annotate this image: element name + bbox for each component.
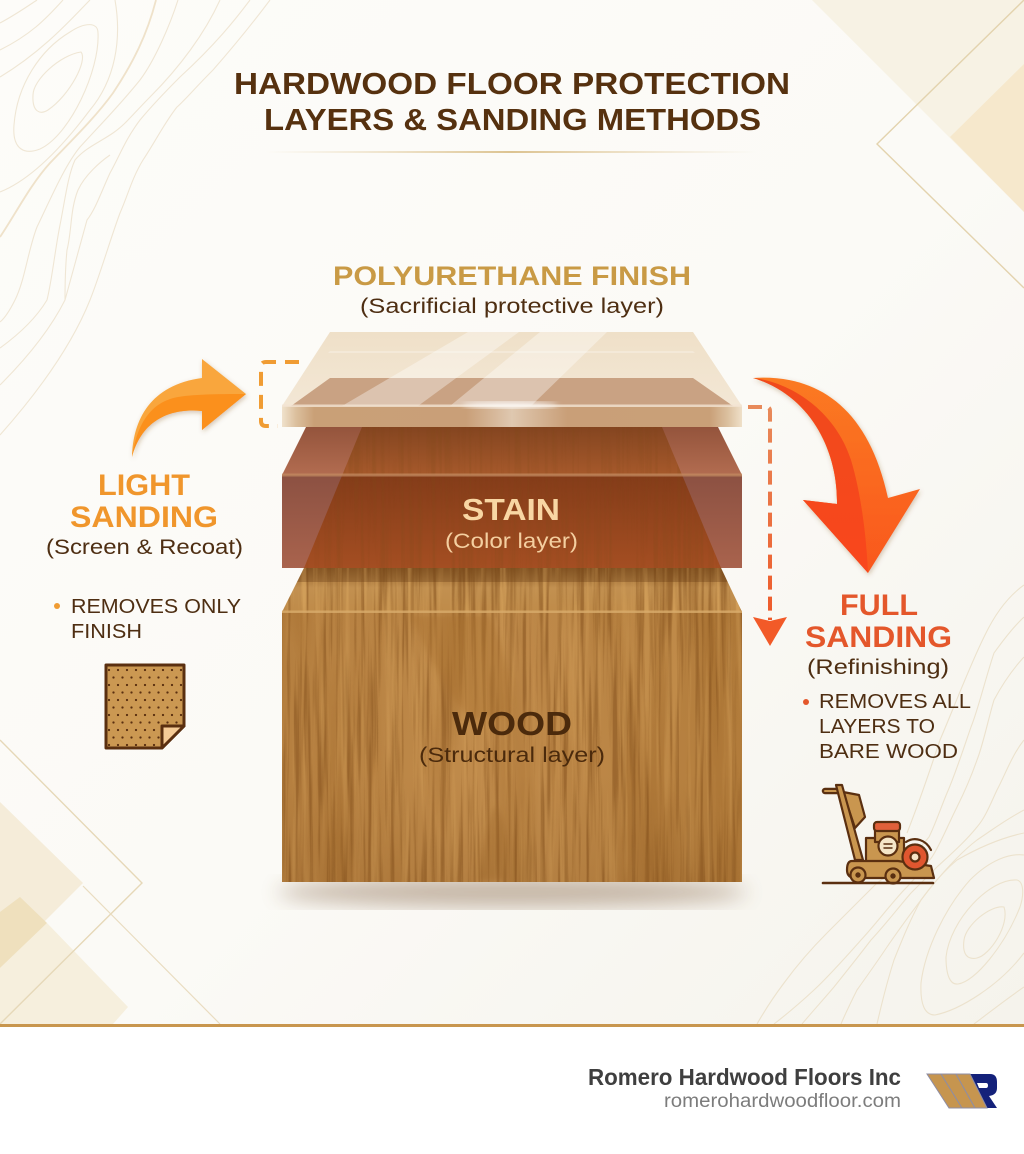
heading: light sanding: SANDING	[70, 501, 218, 534]
bullet: removes all layers	[803, 691, 971, 763]
stain label: STAIN	[462, 492, 560, 527]
bullet: removes all layers: LAYERS TO	[819, 716, 935, 738]
heading: full sanding: SANDING	[805, 621, 952, 654]
footer company name: Romero Hardwood Floors Inc	[588, 1064, 901, 1090]
wood label: WOOD	[452, 705, 572, 742]
bracket: light sanding range	[261, 362, 299, 426]
stain label: (Color layer)	[445, 530, 578, 553]
heading: polyurethane finish label: (Sacrificial protective layer)	[360, 294, 664, 318]
icon: sandpaper	[106, 665, 184, 748]
title	[234, 66, 790, 137]
bullet: removes only finish: FINISH	[71, 621, 142, 643]
stain layer	[282, 427, 742, 568]
dashed arrow: full sanding depth	[748, 407, 787, 646]
wood label	[419, 705, 605, 767]
polyurethane layer	[282, 332, 742, 427]
arrow: light sanding	[132, 359, 246, 457]
heading: light sanding	[46, 469, 243, 559]
heading: full sanding: (Refinishing)	[807, 656, 949, 679]
bullet: removes only finish	[54, 596, 241, 643]
icon: floor sander	[823, 785, 934, 884]
footer company name	[588, 1064, 901, 1112]
footer company name: romerohardwoodfloor.com	[664, 1091, 901, 1112]
heading: polyurethane finish label: POLYURETHANE FINISH	[333, 261, 691, 291]
layered floor diagram	[277, 332, 747, 907]
wood layer	[282, 568, 742, 882]
title: LAYERS & SANDING METHODS	[264, 102, 761, 137]
footer	[0, 1024, 1024, 1154]
heading: full sanding: FULL	[840, 589, 918, 622]
heading: polyurethane finish label	[333, 261, 691, 318]
title: HARDWOOD FLOOR PROTECTION	[234, 66, 790, 101]
heading: light sanding: LIGHT	[98, 469, 190, 502]
icon: company logo	[927, 1074, 997, 1108]
arrow: full sanding	[753, 378, 920, 573]
heading: light sanding: (Screen & Recoat)	[46, 536, 243, 559]
wood label: (Structural layer)	[419, 744, 605, 767]
bullet: removes all layers: BARE WOOD	[819, 741, 958, 763]
bullet: removes all layers: REMOVES ALL	[819, 691, 971, 713]
heading: full sanding	[805, 589, 952, 679]
stain label	[445, 492, 578, 553]
bullet: removes only finish: REMOVES ONLY	[71, 596, 241, 618]
